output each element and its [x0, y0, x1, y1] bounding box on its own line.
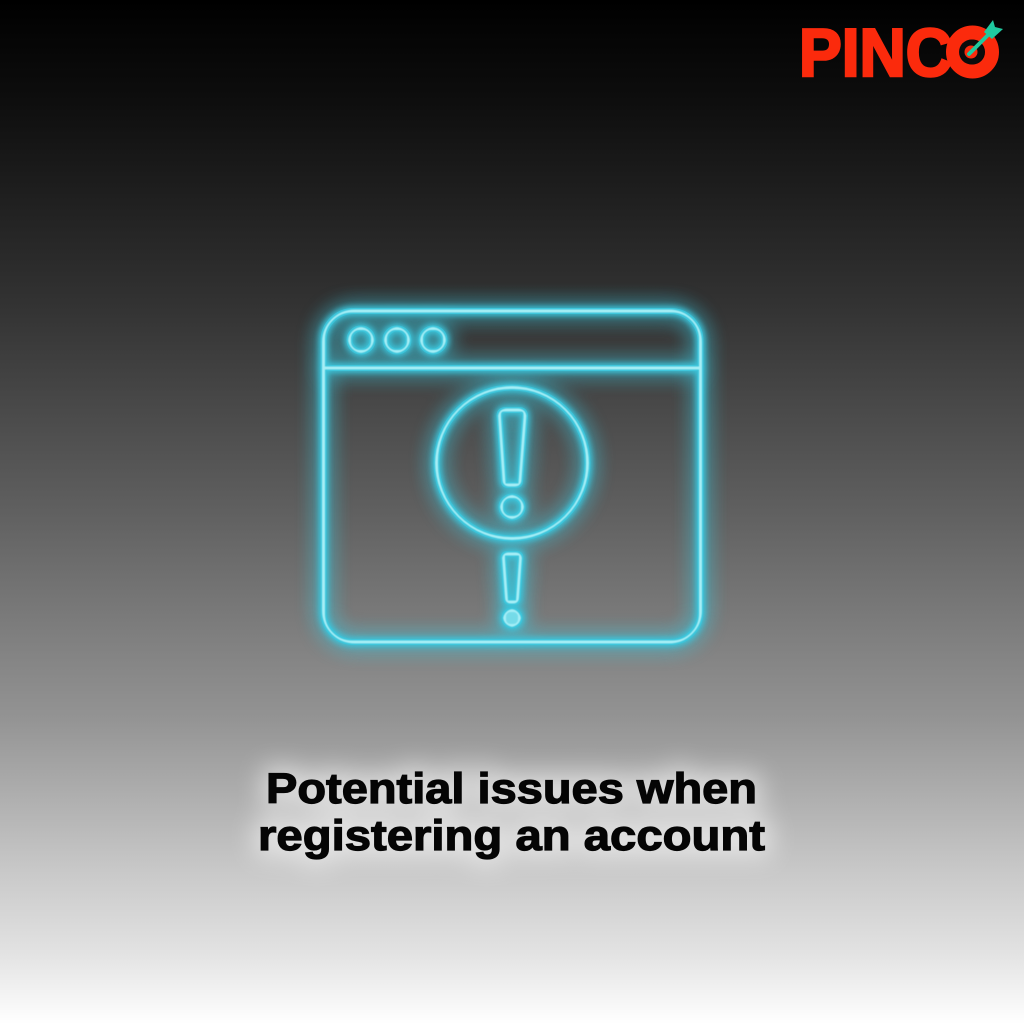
logo: PINCO	[799, 15, 1003, 91]
window frame	[324, 311, 700, 642]
window control dots	[350, 328, 444, 352]
logo letter O: O	[948, 15, 998, 91]
title line 2: registering an account	[258, 813, 765, 860]
warning circle	[436, 388, 588, 538]
neon browser window icon	[324, 311, 700, 642]
small exclamation mark	[504, 554, 520, 626]
logo target	[953, 20, 1003, 72]
title line 1: Potential issues when	[266, 766, 757, 813]
title bar divider	[324, 365, 700, 371]
title text	[258, 766, 765, 860]
logo wordmark: PINC	[799, 15, 952, 91]
large exclamation mark	[500, 410, 525, 518]
